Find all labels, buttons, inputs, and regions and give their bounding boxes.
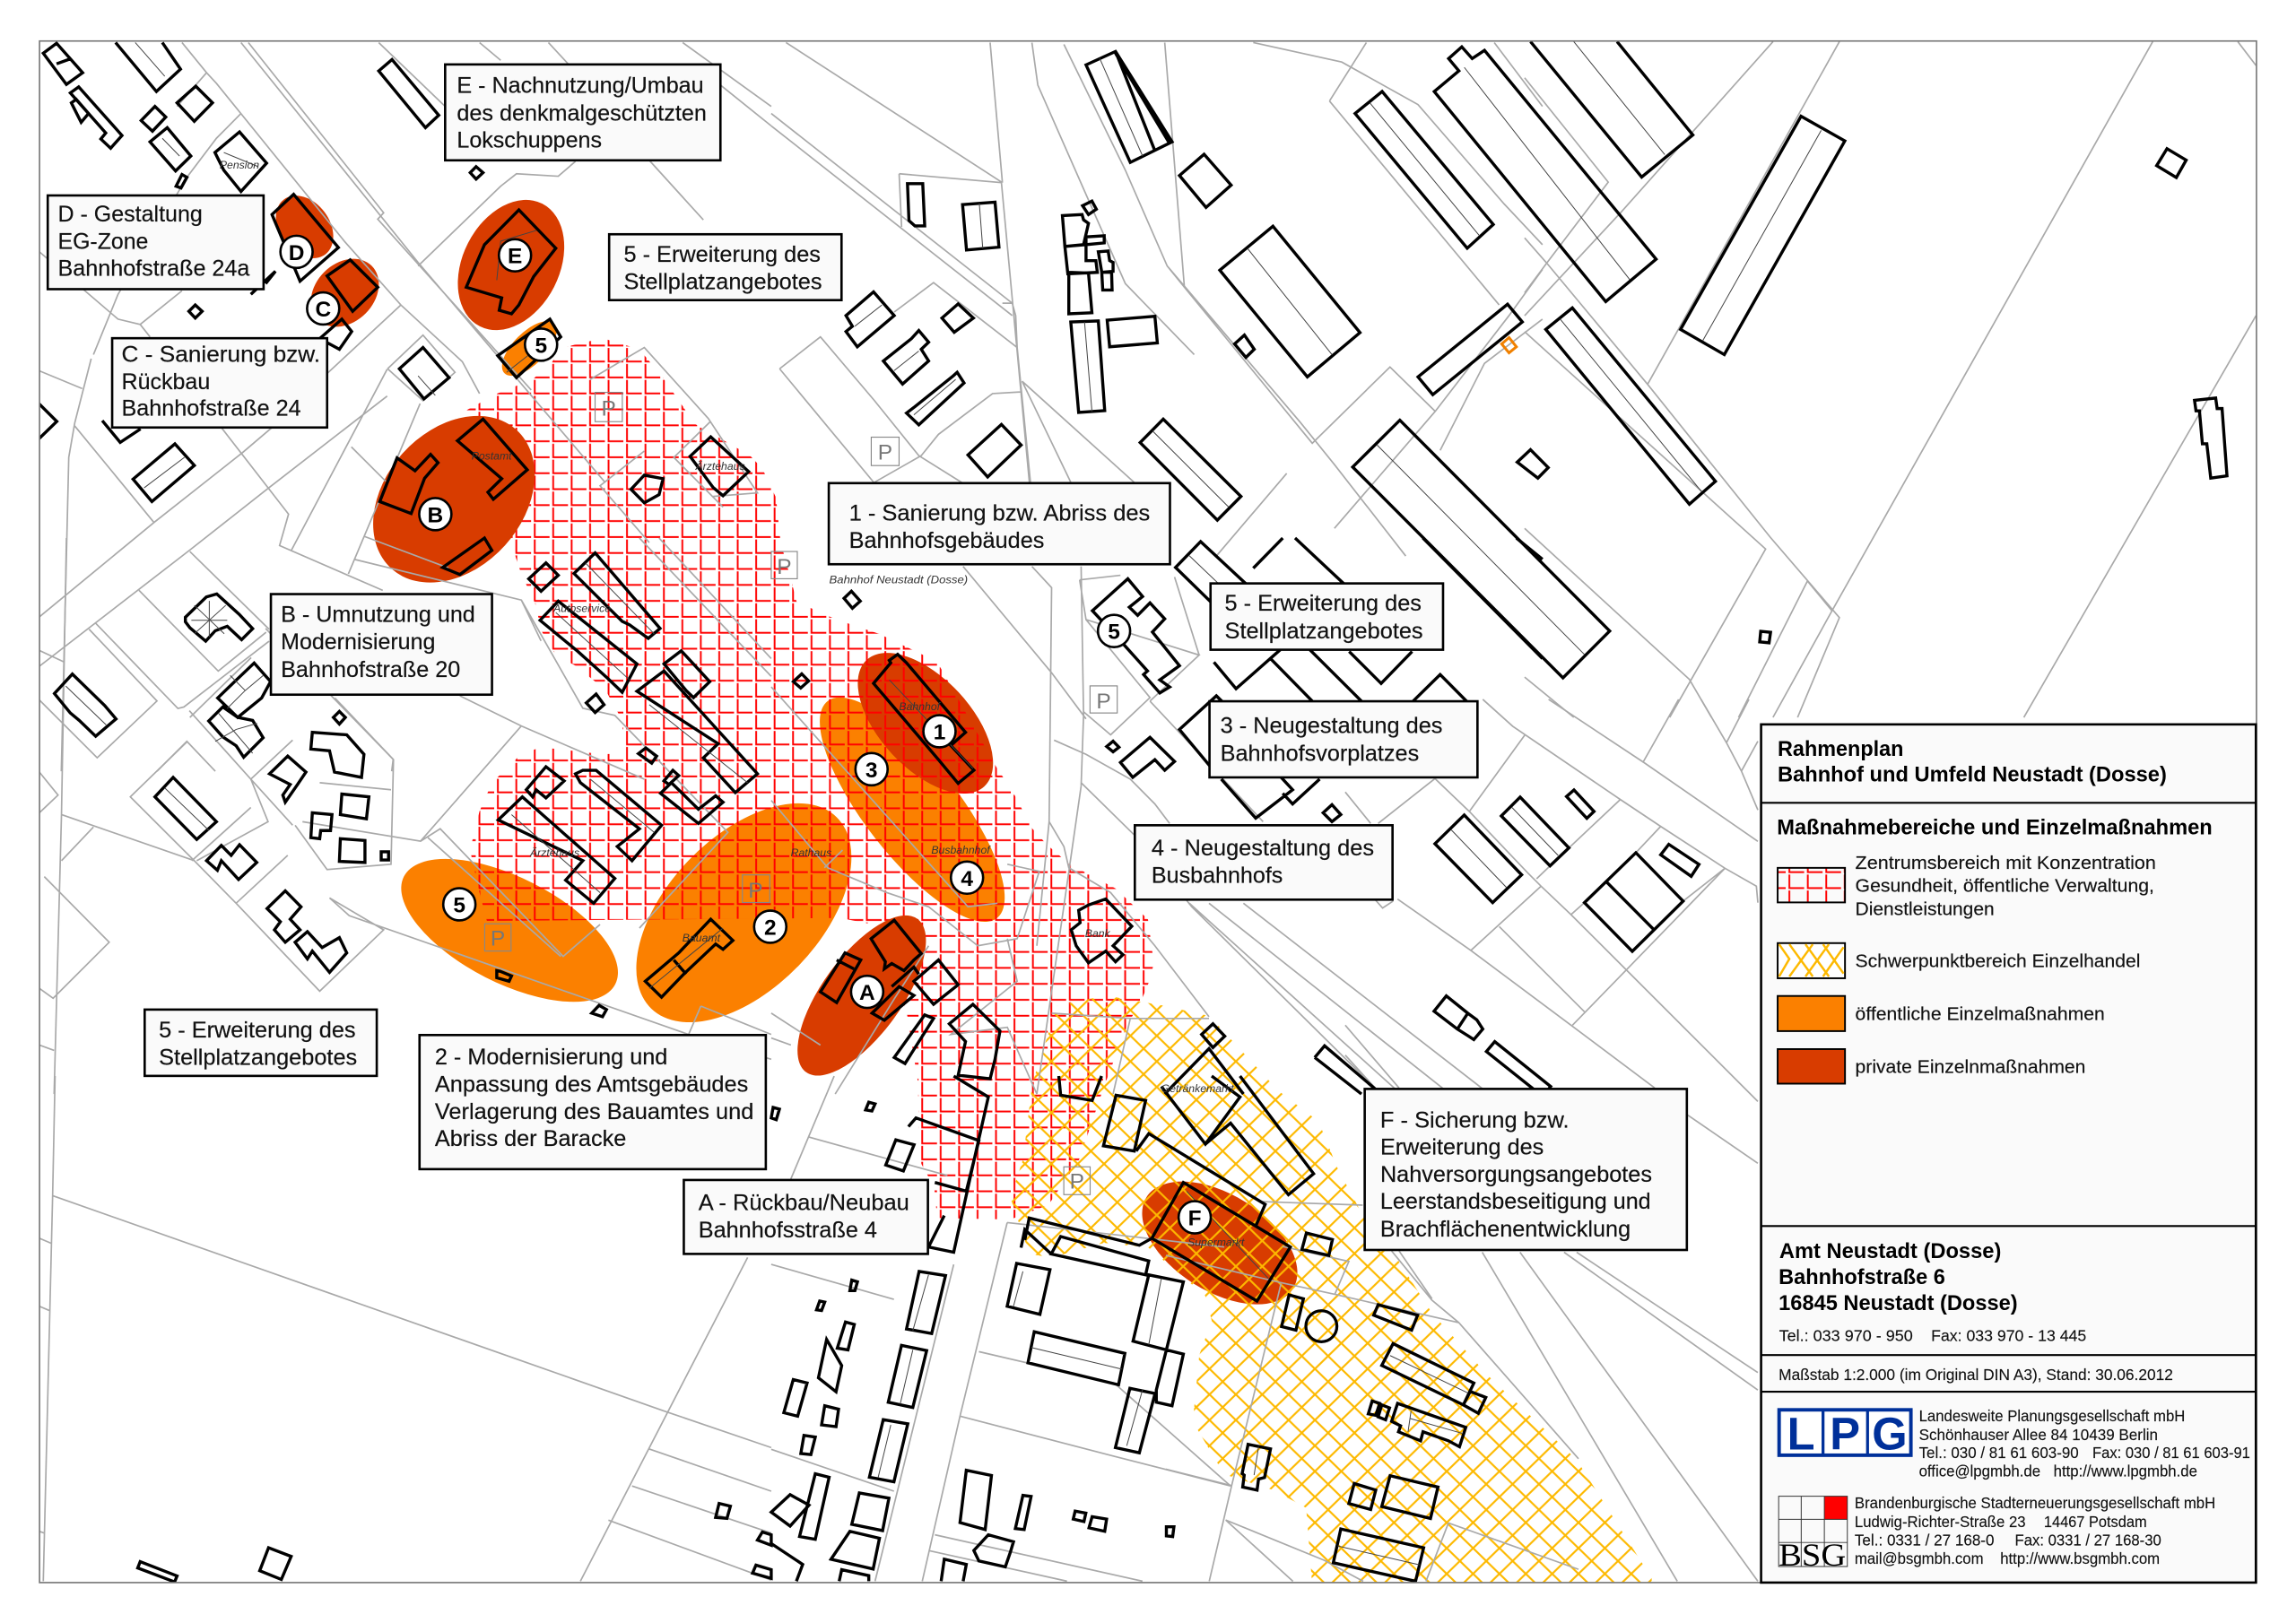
LPG address: Landesweite Planungsgesellschaft mbH: [1919, 1407, 2185, 1425]
private measure ellipse F: [1142, 1182, 1298, 1305]
callout 5 north: [609, 234, 841, 300]
callout B: Modernisierung: [281, 629, 435, 655]
marker C: C: [315, 298, 331, 322]
parking symbols: P: [777, 555, 792, 579]
plan title: Bahnhof und Umfeld Neustadt (Dosse): [1778, 763, 2167, 786]
marker 5 east: 5: [1108, 621, 1120, 645]
LPG address: http://www.lpgmbh.de: [2054, 1462, 2197, 1480]
panel: legend and title block: [1761, 725, 2256, 1583]
marker 5 east: [1098, 615, 1130, 647]
callout 2: 2 - Modernisierung und: [435, 1045, 667, 1070]
marker 4: [951, 862, 983, 894]
legend item: centre area: Zentrumsbereich mit Konzentration: [1856, 854, 2156, 873]
callout E: [445, 65, 720, 161]
marker 3: 3: [865, 759, 878, 783]
client address: Bahnhofstraße 6: [1779, 1266, 1945, 1289]
parking symbols: P: [878, 441, 892, 465]
small place names: Bahnhof Neustadt (Dosse): [830, 574, 968, 586]
small place names: Postamt: [472, 450, 512, 463]
callout 5 east: 5 - Erweiterung des: [1225, 591, 1422, 616]
buildings in the retail area: [1242, 1233, 1486, 1581]
BSG address: Ludwig-Richter-Straße 23: [1855, 1513, 2026, 1531]
buildings east of the tracks: [1434, 790, 1699, 1097]
callout 5 north: Stellplatzangebotes: [624, 269, 822, 294]
client address: Fax: 033 970 - 13 445: [1931, 1327, 2086, 1345]
small place names: Rathaus: [791, 846, 831, 859]
marker B: [419, 498, 451, 530]
private measure ellipse 1: [857, 653, 994, 794]
small place names: Bahnhof: [899, 700, 942, 713]
BSG address: [1855, 1494, 2215, 1567]
client address: Amt Neustadt (Dosse): [1779, 1240, 2001, 1263]
callout 4: Busbahnhofs: [1152, 863, 1283, 888]
marker D: [281, 236, 313, 268]
callout A: A - Rückbau/Neubau: [699, 1191, 909, 1216]
parking symbols: P: [748, 879, 763, 903]
public measure ellipses (orange): [380, 312, 1034, 1062]
callout 1: 1 - Sanierung bzw. Abriss des: [849, 500, 1150, 525]
BSG address: Tel.: 0331 / 27 168-0: [1855, 1532, 1995, 1549]
small place names: Bank: [1085, 927, 1111, 940]
legend item: public measures: [1778, 996, 2105, 1031]
logo: BSG: [1779, 1497, 1848, 1573]
small place names: Autoservice: [552, 602, 611, 614]
callout 5 west: Stellplatzangebotes: [159, 1046, 357, 1071]
callout 5 east: Stellplatzangebotes: [1225, 619, 1423, 644]
callout 1: Bahnhofsgebäudes: [849, 528, 1044, 553]
logo: BSG: BSG: [1779, 1537, 1846, 1573]
marker E: [499, 239, 531, 272]
marker A: [851, 976, 883, 1008]
legend item: centre area: [1778, 854, 2156, 919]
legend item: retail area: Schwerpunktbereich Einzelhandel: [1856, 952, 2140, 972]
callout A: [683, 1180, 928, 1254]
callout D: [48, 195, 264, 289]
small place names: Busbahnhof: [931, 844, 991, 856]
small place names: Bauamt: [683, 932, 721, 944]
legend item: retail area: [1778, 943, 2140, 978]
callout 3: 3 - Neugestaltung des: [1221, 713, 1442, 738]
callout F: Leerstandsbeseitigung und: [1380, 1189, 1651, 1214]
callout C: Bahnhofstraße 24: [122, 395, 301, 421]
marker 2: 2: [764, 916, 777, 940]
marker 5 at Lokschuppen: [525, 328, 557, 360]
marker 5 at Lokschuppen: 5: [535, 334, 547, 358]
small place names: Pension: [220, 159, 259, 171]
callout 4: 4 - Neugestaltung des: [1152, 836, 1374, 861]
callout 3: Bahnhofsvorplatzes: [1221, 741, 1419, 766]
callout C: C - Sanierung bzw.: [122, 342, 320, 367]
houses west of the plaza: [39, 404, 438, 757]
client address: Tel.: 033 970 - 950: [1779, 1327, 1913, 1345]
BSG address: mail@bsgmbh.com: [1855, 1549, 1984, 1567]
marker 4: 4: [961, 867, 973, 891]
callout E: Lokschuppens: [457, 128, 602, 153]
BSG address: http://www.bsgmbh.com: [2000, 1549, 2160, 1567]
plan title: Rahmenplan: [1778, 738, 1903, 761]
marker 5 west: [443, 889, 475, 920]
logo: LPG: [1779, 1408, 1911, 1459]
parking symbols: P: [602, 397, 616, 421]
plan title: [1778, 738, 2167, 786]
marker E: E: [508, 245, 522, 269]
LPG address: [1919, 1407, 2250, 1480]
marker 2: [754, 911, 787, 942]
callout A: Bahnhofsstraße 4: [699, 1218, 877, 1243]
marker 3: [856, 753, 888, 785]
callout D: D - Gestaltung: [57, 202, 203, 227]
callout 2: Verlagerung des Bauamtes und: [435, 1099, 753, 1124]
callout D: EG-Zone: [57, 230, 148, 255]
logo: LPG: G: [1872, 1408, 1908, 1459]
callout 2: Abriss der Baracke: [435, 1126, 626, 1151]
marker D: D: [289, 241, 304, 265]
marker B: B: [428, 503, 443, 527]
legend item: centre area: Dienstleistungen: [1856, 899, 1995, 919]
LPG address: Tel.: 030 / 81 61 603-90: [1919, 1444, 2079, 1462]
callout 2: [420, 1035, 766, 1169]
legend item: private measures: private Einzelnmaßnahmen: [1856, 1057, 2085, 1077]
marker 5 west: 5: [453, 893, 465, 917]
callout D: Bahnhofstraße 24a: [57, 256, 250, 282]
callout E: E - Nachnutzung/Umbau: [457, 74, 704, 99]
LPG address: Fax: 030 / 81 61 603-91: [2092, 1444, 2250, 1462]
BSG address: Brandenburgische Stadterneuerungsgesellschaft mbH: [1855, 1494, 2215, 1512]
small orange building: [1501, 337, 1517, 352]
LPG address: office@lpgmbh.de: [1919, 1462, 2040, 1480]
private measure ellipses: [264, 182, 950, 1096]
marker 1: [924, 716, 955, 747]
small place names: Ärztehaus: [695, 460, 745, 473]
scale and date: Maßstab 1:2.000 (im Original DIN A3), Stand: 30.06.2012: [1779, 1366, 2173, 1384]
callout 5 east: [1211, 584, 1443, 650]
callout B: [271, 595, 492, 695]
logo: LPG: L: [1787, 1408, 1815, 1459]
callout 1: [829, 483, 1170, 564]
long rail-side sheds: [1352, 47, 1657, 678]
legend item: private measures: [1778, 1049, 2085, 1084]
callout 5 west: 5 - Erweiterung des: [159, 1018, 356, 1043]
small place names: Ärztehaus: [529, 846, 579, 859]
callout F: Erweiterung des: [1380, 1135, 1544, 1160]
callout C: Rückbau: [122, 369, 210, 395]
legend item: public measures: öffentliche Einzelmaßnahmen: [1856, 1004, 2105, 1024]
callout C: [112, 338, 327, 428]
small place names: [220, 159, 1245, 1248]
callout 5 west: [144, 1010, 377, 1076]
marker F: F: [1188, 1207, 1202, 1231]
parking symbols: P: [1070, 1170, 1084, 1194]
callout 4: [1135, 825, 1393, 899]
callout B: Bahnhofstraße 20: [281, 657, 460, 682]
callout F: Nahversorgungsangebotes: [1380, 1162, 1652, 1187]
callout F: Brachflächenentwicklung: [1380, 1217, 1631, 1242]
LPG address: Schönhauser Allee 84 10439 Berlin: [1919, 1426, 2158, 1444]
client address: 16845 Neustadt (Dosse): [1779, 1292, 2018, 1315]
legend item: centre area: Gesundheit, öffentliche Verwaltung,: [1856, 877, 2154, 897]
legend heading: Maßnahmebereiche und Einzelmaßnahmen: [1777, 817, 2213, 840]
callout 5 north: 5 - Erweiterung des: [624, 242, 821, 267]
client address: [1779, 1240, 2086, 1345]
hatch: retail area (yellow): [1011, 995, 1652, 1583]
marker 1: 1: [934, 721, 945, 745]
hatch: centre area (red): [442, 338, 1154, 1219]
BSG address: 14467 Potsdam: [2044, 1513, 2147, 1531]
parking symbols: P: [491, 927, 505, 951]
callout F: F - Sicherung bzw.: [1380, 1108, 1570, 1133]
marker F: [1178, 1202, 1211, 1234]
callout F: [1365, 1089, 1687, 1250]
callout E: des denkmalgeschützten: [457, 100, 707, 126]
small place names: Supermarkt: [1187, 1236, 1245, 1248]
parking symbols: [484, 393, 1118, 1194]
callout B: B - Umnutzung und: [281, 603, 475, 628]
parking symbols: P: [1096, 690, 1111, 714]
marker C: [307, 292, 339, 325]
callout 2: Anpassung des Amtsgebäudes: [435, 1072, 748, 1097]
callout 3: [1210, 701, 1477, 777]
small place names: Getränkemarkt: [1161, 1082, 1234, 1095]
logo: LPG: P: [1830, 1408, 1860, 1459]
BSG address: Fax: 0331 / 27 168-30: [2015, 1532, 2161, 1549]
map markers: [281, 236, 1211, 1234]
marker A: A: [859, 981, 875, 1005]
